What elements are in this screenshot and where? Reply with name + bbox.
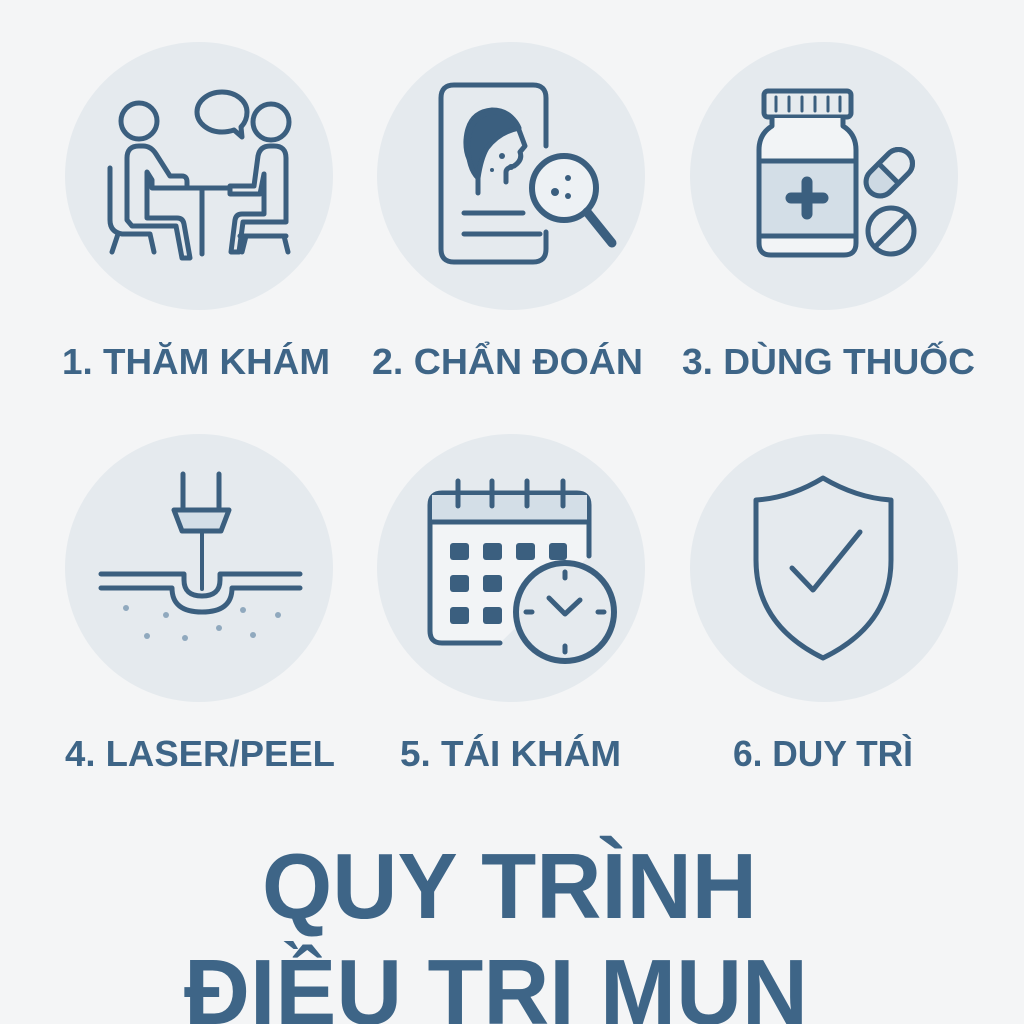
- icon: document with face and magnifier: [441, 85, 612, 262]
- label: step 5: 5. TÁI KHÁM: [400, 733, 621, 774]
- title: QUY TRÌNH: [262, 834, 757, 938]
- panel: step 1 consultation: [65, 42, 333, 310]
- panel: step 3 medication: [690, 42, 958, 310]
- label: step 3: 3. DÙNG THUỐC: [682, 340, 975, 382]
- panel: step 2 diagnosis: [377, 42, 645, 310]
- label: step 1: 1. THĂM KHÁM: [62, 341, 330, 382]
- title: [184, 834, 808, 1024]
- panel: step 5 follow-up: [377, 434, 645, 702]
- icon: two people at table: [110, 92, 289, 258]
- label: step 2: 2. CHẨN ĐOÁN: [372, 340, 643, 382]
- icon: medicine bottle and pills: [759, 91, 918, 255]
- label: step 4: 4. LASER/PEEL: [65, 733, 335, 774]
- panel: step 4 laser/peel: [65, 434, 333, 702]
- icon: shield with check: [756, 478, 891, 658]
- label: step 6: 6. DUY TRÌ: [733, 733, 913, 774]
- panel: step 6 maintenance: [690, 434, 958, 702]
- icon: laser on skin: [101, 474, 300, 641]
- icon: calendar with clock: [430, 481, 614, 661]
